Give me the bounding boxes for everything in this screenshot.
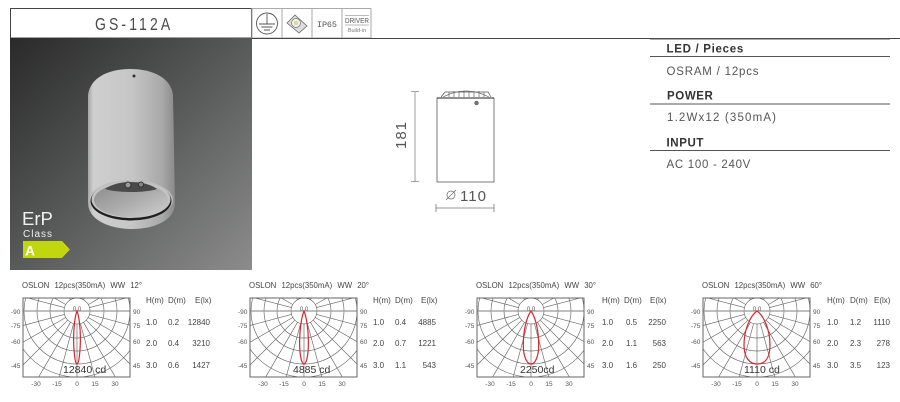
photometric panel: WW 60: 278 [877,339,891,348]
beam curve [300,311,308,364]
title box: GS-112A [95,16,171,34]
product photo panel [10,38,252,270]
photometric panel: WW 30: -30 [485,381,495,388]
title box [10,8,252,38]
photometric panel: WW 60: -15 [732,381,742,388]
photometric panel: WW 60: 30 [791,381,799,388]
photometric panel: WW 30: E(lx) [650,296,667,305]
photometric panel: WW 20: 75 [360,323,368,330]
icon: driver build-in [342,8,371,38]
photometric panel: WW 20: OSLON 12pcs(350mA) WW 20° [249,281,369,290]
photometric panel: WW 60: 1.0 [827,318,839,327]
photometric panel: WW 12: -60 [11,339,21,346]
photometric panel: WW 30: 250 [653,361,667,370]
beam curve [74,311,80,364]
photometric panel: WW 60: 2.0 [827,339,839,348]
photometric panel: WW 30: 2.0 [602,339,614,348]
photometric panel: WW 30: 1.6 [626,361,638,370]
photometric panel: WW 12: D(m) [168,296,186,305]
photometric panel: WW 20 [216,245,438,388]
photometric panel: WW 12: 45 [133,363,141,370]
photometric panel: WW 30: 60 [587,339,595,346]
photometric panel: WW 60: 45 [813,363,821,370]
photometric panel: WW 60: 1.2 [850,318,862,327]
photometric panel: WW 60: -60 [691,339,701,346]
photometric panel: WW 60: D(m) [850,296,868,305]
photometric panel: WW 60: E(lx) [874,296,891,305]
photometric panel: WW 30: 1.0 [602,318,614,327]
photometric panel: WW 30: -90 [465,309,475,316]
photometric panel: WW 20: 90 [360,309,368,316]
photometric panel: WW 20: 1.0 [373,318,385,327]
energy class arrow: A [25,242,35,258]
icon: IP65: IP65 [317,20,337,30]
photometric panel: WW 60: 1110 cd [744,364,780,376]
photometric panel: WW 12: OSLON 12pcs(350mA) WW 12° [22,281,142,290]
specifications panel [650,39,890,171]
photometric panel: WW 20: -30 [258,381,268,388]
beam curve [744,311,770,364]
Class label: Class [23,229,53,240]
photometric panel: WW 60: 2.3 [850,339,862,348]
specifications panel: AC 100 - 240V [666,159,751,171]
photometric panel: WW 20: 30 [338,381,346,388]
photometric panel: WW 12: -75 [11,323,21,330]
photometric panel: WW 30: OSLON 12pcs(350mA) WW 30° [476,281,596,290]
photometric panel: WW 30: -60 [465,339,475,346]
energy class arrow [23,241,70,258]
photometric panel: WW 30: 30 [565,381,573,388]
photometric panel: WW 12: 0 [75,381,79,388]
icon: driver build-in: Build-in [348,28,366,34]
photometric panel: WW 20: -60 [238,339,248,346]
photometric panel: WW 20: -45 [238,363,248,370]
photometric panel: WW 60: 15 [771,381,779,388]
icon: LED chip [282,8,312,38]
photometric panel: WW 12: 0.2 [168,318,180,327]
photometric panel: WW 60: 123 [877,361,891,370]
photometric panel: WW 12: 3210 [192,339,211,348]
photometric panel: WW 12: H(m) [146,296,164,305]
specifications panel: 1.2Wx12 (350mA) [667,112,776,124]
photometric panel: WW 20: 0.0 [300,307,309,313]
photometric panel: WW 30: 0.0 [527,307,536,313]
specifications panel: LED / Pieces [666,44,744,56]
photometric panel: WW 60: 3.0 [827,361,839,370]
photometric panel: WW 12: 15 [91,381,99,388]
specifications panel: OSRAM / 12pcs [666,66,759,78]
photometric panel: WW 30: 1.1 [626,339,638,348]
photometric panel: WW 12: -30 [31,381,41,388]
photometric panel: WW 20: D(m) [395,296,413,305]
photometric panel: WW 30: -45 [465,363,475,370]
photometric panel: WW 20: -90 [238,309,248,316]
fixture outline [437,91,494,182]
photometric panel: WW 12: 12840 cd [63,364,106,376]
photometric panel: WW 60: -75 [691,323,701,330]
photometric panel: WW 12: 60 [133,339,141,346]
photometric panel: WW 60: OSLON 12pcs(350mA) WW 60° [702,281,822,290]
photometric panel: WW 12: -15 [52,381,62,388]
photometric panel: WW 30: 0.5 [626,318,638,327]
diameter dimension: 110 [460,188,487,205]
specifications panel: POWER [667,90,714,102]
photometric panel: WW 30: 90 [587,309,595,316]
photometric panel: WW 30: 45 [587,363,595,370]
photometric panel: WW 12: 30 [111,381,119,388]
photometric panel: WW 12: 75 [133,323,141,330]
photometric panel: WW 30 [443,245,667,388]
photometric panel: WW 12: 0.0 [73,307,82,313]
photometric panel: WW 12: 12840 [188,318,211,327]
photometric panel: WW 30: 75 [587,323,595,330]
photometric panel: WW 30: -15 [506,381,516,388]
photometric panel: WW 12: -45 [11,363,21,370]
photometric panel: WW 60: -90 [691,309,701,316]
photometric panel: WW 20: 543 [423,361,437,370]
photometric panel: WW 20: -75 [238,323,248,330]
photometric panel: WW 20: 0 [302,381,306,388]
photometric panel: WW 20: -15 [279,381,289,388]
photometric panel: WW 12 [0,245,212,388]
photometric panel: WW 30: D(m) [624,296,642,305]
photometric panel: WW 12: 90 [133,309,141,316]
photometric panel: WW 30: 15 [545,381,553,388]
photometric panel: WW 20: 0.7 [395,339,407,348]
photometric panel: WW 60: 0 [755,381,759,388]
photometric panel: WW 60: -45 [691,363,701,370]
photometric panel: WW 60: H(m) [827,296,845,305]
photometric panel: WW 60: -30 [711,381,721,388]
photometric panel: WW 20: 15 [318,381,326,388]
photometric panel: WW 30: 3.0 [602,361,614,370]
photometric panel: WW 30: H(m) [602,296,620,305]
photometric panel: WW 60 [669,245,891,388]
photometric panel: WW 20: H(m) [373,296,391,305]
photometric panel: WW 20: 60 [360,339,368,346]
photometric panel: WW 12: 0.4 [168,339,180,348]
photometric panel: WW 12: E(lx) [195,296,212,305]
photometric panel: WW 30: 2250 [648,318,667,327]
icon: driver build-in: DRIVER [345,18,369,25]
photometric panel: WW 20: 4885 [418,318,437,327]
photometric panel: WW 20: 0.4 [395,318,407,327]
photometric panel: WW 60: 0.0 [753,307,762,313]
photometric panel: WW 12: 1.0 [146,318,158,327]
photometric panel: WW 20: 45 [360,363,368,370]
specifications panel: INPUT [666,138,704,150]
height dimension: 181 [393,121,410,149]
beam curve [523,311,539,364]
photometric panel: WW 12: -90 [11,309,21,316]
photometric panel: WW 20: 4885 cd [293,364,331,376]
photometric panel: WW 60: 1110 [873,318,891,327]
photometric panel: WW 12: 0.6 [168,361,180,370]
photometric panel: WW 12: 2.0 [146,339,158,348]
photometric panel: WW 20: 2.0 [373,339,385,348]
photometric panel: WW 20: E(lx) [421,296,438,305]
photometric panel: WW 20: 1.1 [395,361,407,370]
photometric panel: WW 12: 3.0 [146,361,158,370]
photometric panel: WW 20: 3.0 [373,361,385,370]
photometric panel: WW 30: 0 [529,381,533,388]
photometric panel: WW 12: 1427 [192,361,211,370]
photometric panel: WW 20: 1221 [418,339,437,348]
dimension drawing [393,91,494,212]
photometric panel: WW 60: 90 [813,309,821,316]
photometric panel: WW 60: 60 [813,339,821,346]
icon row [252,8,371,38]
photometric panel: WW 60: 3.5 [850,361,862,370]
photometric panel: WW 30: -75 [465,323,475,330]
product: cylinder lamp [88,69,175,229]
icon: grounding [252,8,282,38]
photometric panel: WW 30: 2250cd [520,364,555,376]
photometric panel: WW 30: 563 [653,339,667,348]
photometric panel: WW 60: 75 [813,323,821,330]
ErP label: ErP [22,208,53,229]
